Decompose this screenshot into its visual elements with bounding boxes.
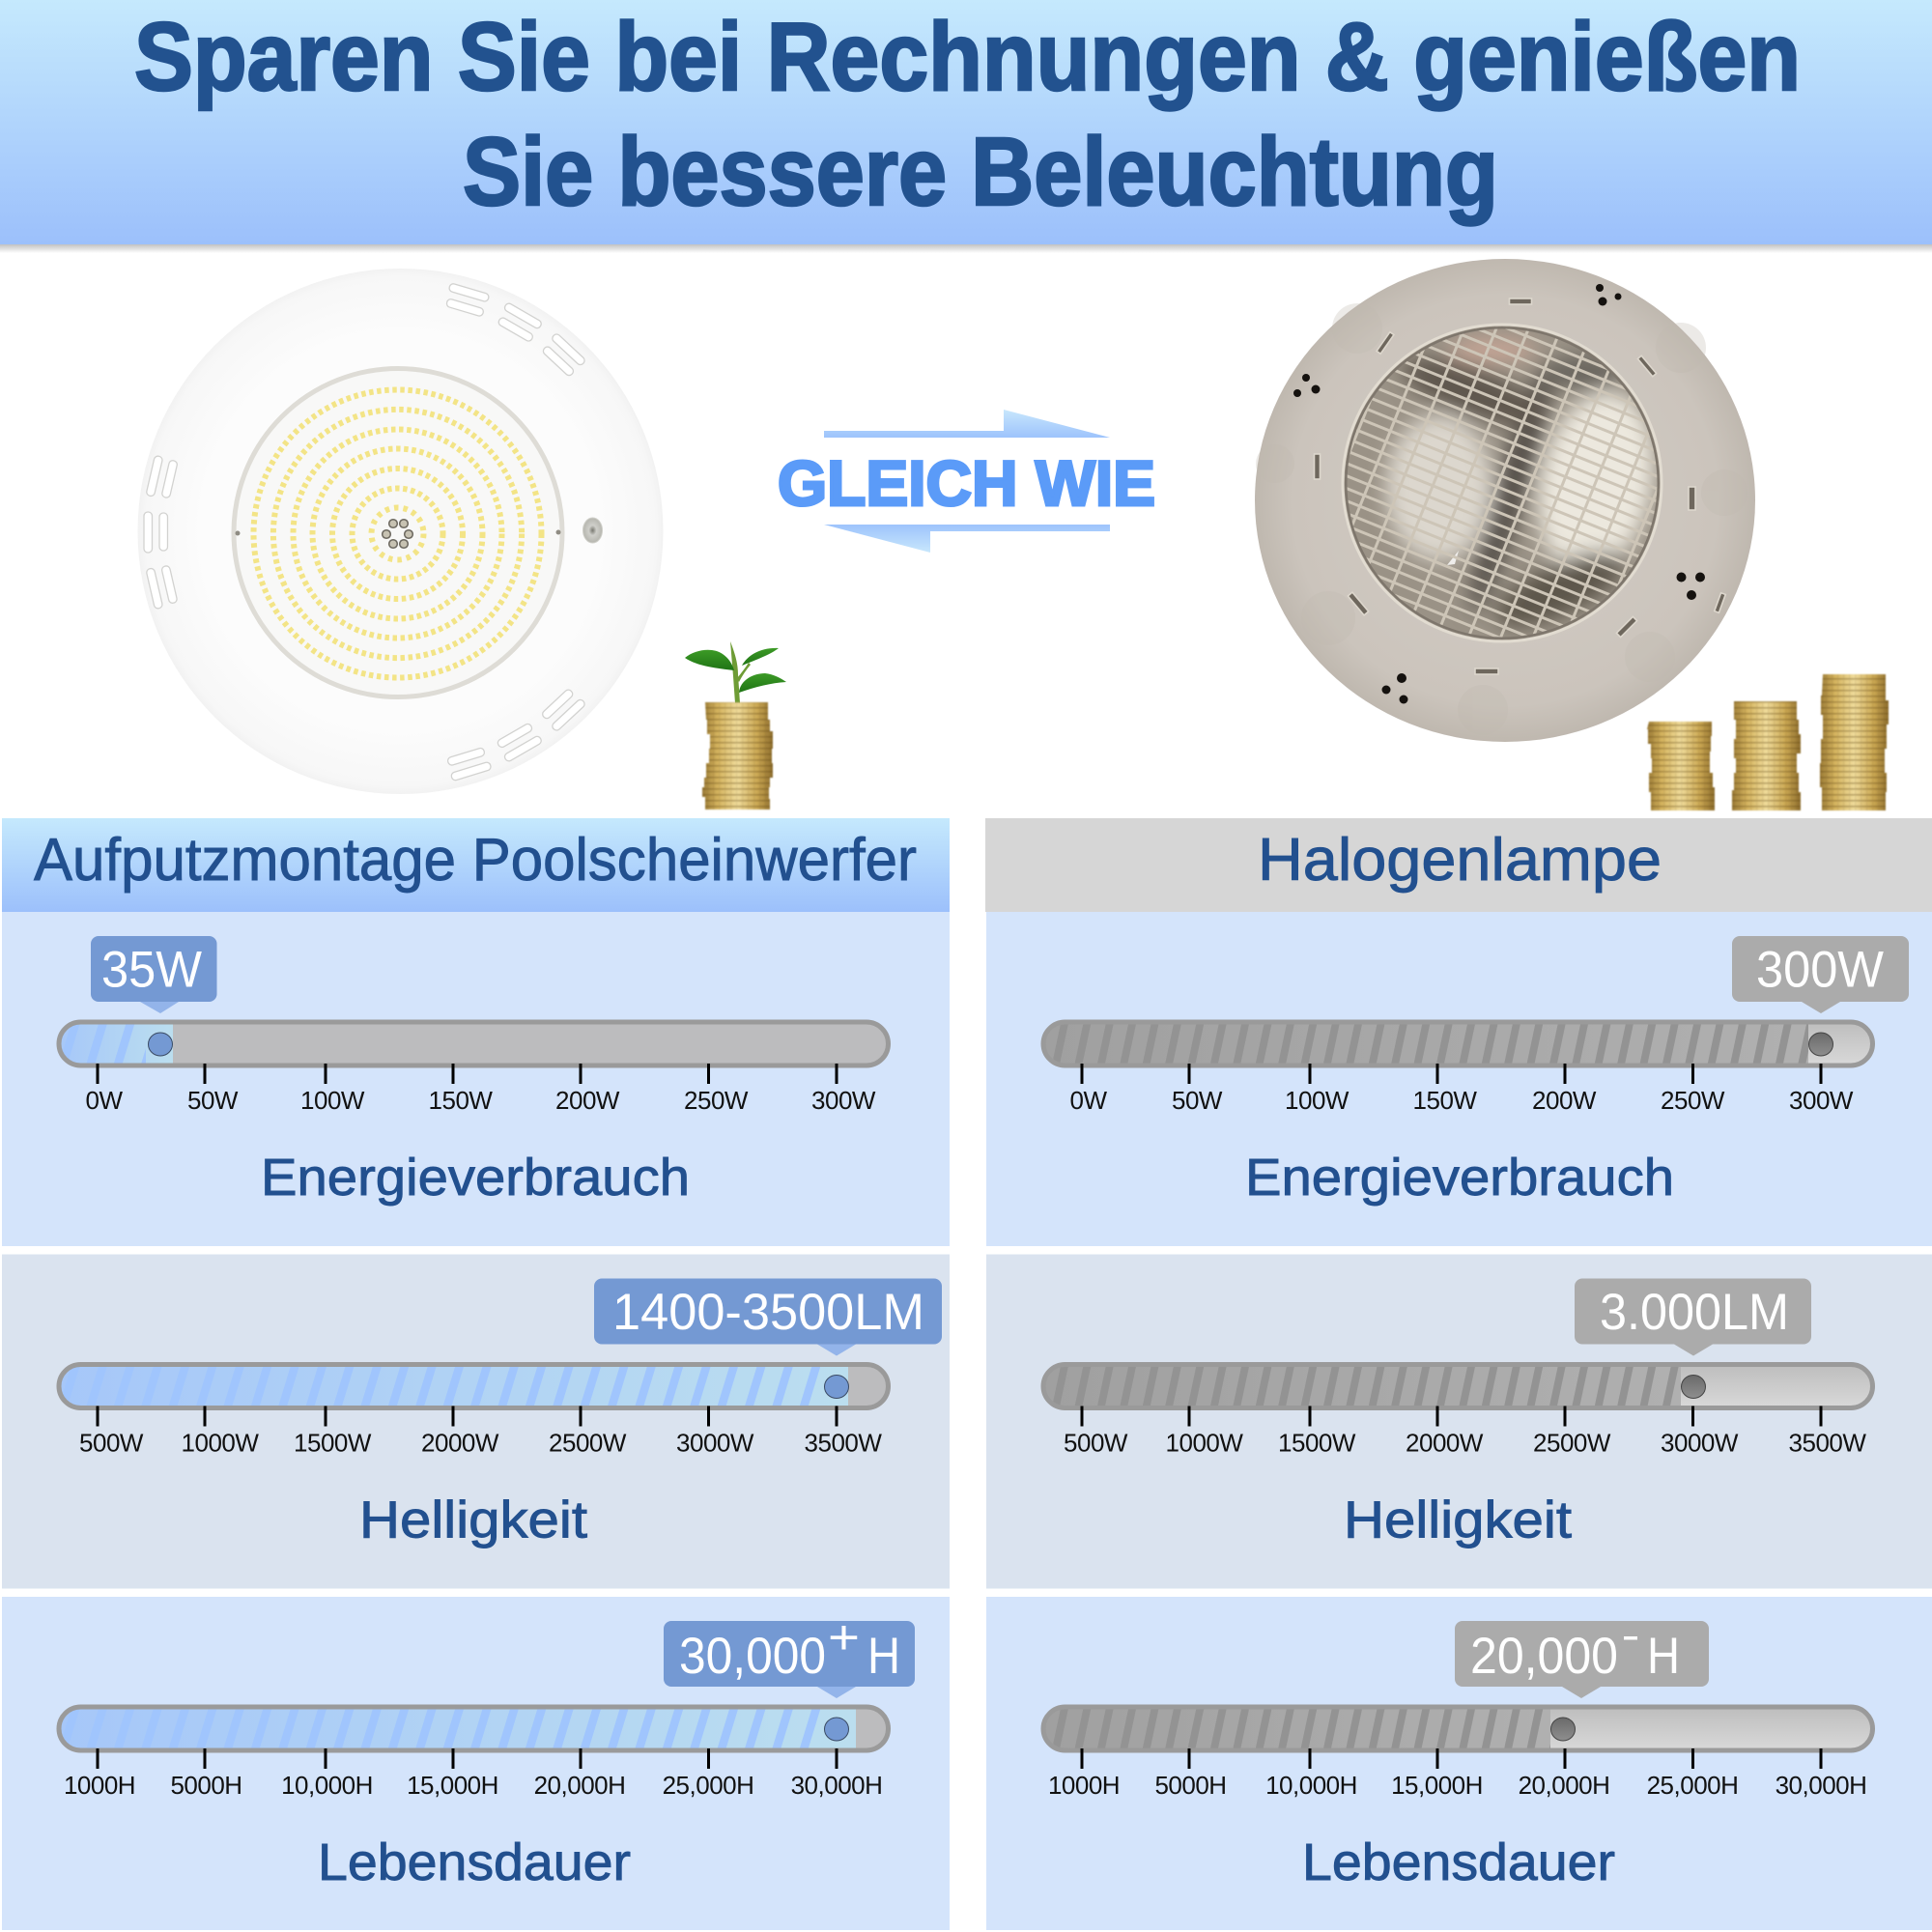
- track: [1041, 1364, 1872, 1408]
- column header: halogen: [985, 818, 1932, 912]
- scale labels: 150W: [1413, 1086, 1477, 1115]
- callout: [594, 1279, 942, 1356]
- scale labels: 300W: [811, 1086, 876, 1115]
- plate pins: [236, 529, 560, 535]
- callout: 20,000: [1470, 1628, 1618, 1685]
- ticks: [97, 1064, 838, 1084]
- metric name: Lebensdauer: [318, 1833, 631, 1891]
- callout: [664, 1610, 915, 1698]
- scale labels: 30,000H: [791, 1771, 882, 1800]
- label: GLEICH WIE: [778, 447, 1155, 519]
- ticks: [1080, 1748, 1822, 1769]
- vent slots: [144, 283, 586, 781]
- medium stack: [1732, 701, 1801, 810]
- ticks: [97, 1406, 838, 1426]
- callout: 35W: [101, 941, 202, 999]
- ticks: [97, 1748, 838, 1769]
- scale labels: 3000W: [676, 1428, 754, 1457]
- scale labels: [64, 1771, 882, 1800]
- rim blobs: [1256, 303, 1747, 735]
- callout: 300W: [1756, 941, 1884, 999]
- coin stack: [702, 702, 773, 810]
- scale labels: 50W: [1172, 1086, 1223, 1115]
- scale labels: 2000W: [1406, 1428, 1484, 1457]
- LED pool lamp image: [137, 269, 663, 794]
- column header: LED: [2, 818, 950, 912]
- callout: [1455, 1621, 1709, 1698]
- coin stacks: [1647, 674, 1889, 810]
- scale labels: 300W: [1789, 1086, 1854, 1115]
- scale labels: [1048, 1771, 1866, 1800]
- track: [1041, 1707, 1872, 1750]
- panel: halogen power: [986, 912, 1932, 1246]
- scale labels: 100W: [300, 1086, 365, 1115]
- metric name: Lebensdauer: [1302, 1833, 1615, 1891]
- title: Sie bessere Beleuchtung: [463, 118, 1498, 226]
- scale labels: 3500W: [1789, 1428, 1866, 1457]
- header banner: [0, 0, 1932, 253]
- scale labels: [79, 1428, 882, 1457]
- panel: halogen brightness: [986, 1254, 1932, 1588]
- callout: H: [867, 1628, 900, 1685]
- track: [57, 1022, 889, 1065]
- scale labels: 30,000H: [1776, 1771, 1866, 1800]
- callout: H: [1647, 1628, 1680, 1685]
- plant growing from coin stack: [685, 641, 786, 810]
- metric name: Helligkeit: [1344, 1492, 1572, 1549]
- scale labels: 250W: [684, 1086, 749, 1115]
- callout: +: [828, 1610, 860, 1664]
- scale labels: 10,000H: [1265, 1771, 1357, 1800]
- scale labels: 1500W: [1278, 1428, 1356, 1457]
- scale labels: 2000W: [421, 1428, 499, 1457]
- scale labels: [1070, 1086, 1854, 1115]
- rim slots: [1314, 298, 1725, 674]
- track: [57, 1707, 889, 1750]
- title: Sparen Sie bei Rechnungen & genießen: [134, 3, 1801, 111]
- callout: 1400-3500LM: [612, 1284, 924, 1341]
- scale labels: 25,000H: [1647, 1771, 1738, 1800]
- scale labels: [1064, 1428, 1866, 1457]
- scale labels: 250W: [1661, 1086, 1725, 1115]
- scale labels: 20,000H: [1519, 1771, 1609, 1800]
- scale labels: 1000W: [182, 1428, 259, 1457]
- callout: 30,000: [679, 1628, 826, 1685]
- scale labels: 50W: [187, 1086, 239, 1115]
- metric name: Energieverbrauch: [261, 1149, 690, 1207]
- panel: LED lifetime: [2, 1597, 950, 1930]
- scale labels: 0W: [85, 1086, 123, 1115]
- scale labels: 10,000H: [281, 1771, 373, 1800]
- metric name: Energieverbrauch: [1245, 1149, 1674, 1207]
- scale labels: 500W: [79, 1428, 144, 1457]
- callout: [1575, 1279, 1811, 1356]
- mounting screw: [583, 518, 603, 543]
- ticks: [1080, 1064, 1822, 1084]
- scale labels: 0W: [1070, 1086, 1107, 1115]
- LED rings: [253, 390, 541, 678]
- arrows and comparison label: [778, 410, 1155, 553]
- callout: [91, 936, 216, 1013]
- panel: LED brightness: [2, 1254, 950, 1588]
- ticks: [1080, 1406, 1822, 1426]
- LED plate: [234, 369, 562, 697]
- column header: halogen: Halogenlampe: [1258, 827, 1662, 894]
- callout: [1732, 936, 1909, 1013]
- scale labels: 25,000H: [663, 1771, 753, 1800]
- scale labels: 1500W: [294, 1428, 372, 1457]
- scale labels: 1000H: [1048, 1771, 1120, 1800]
- scale labels: 200W: [1532, 1086, 1597, 1115]
- arrow: right: [824, 410, 1110, 438]
- centre LEDs: [383, 520, 412, 548]
- callout: 3.000LM: [1600, 1284, 1789, 1341]
- scale labels: 1000H: [64, 1771, 135, 1800]
- halogen lamp image: [1255, 259, 1755, 742]
- track: [1041, 1022, 1872, 1065]
- scale labels: 150W: [429, 1086, 493, 1115]
- tall stack: [1820, 674, 1889, 810]
- scale labels: 5000H: [1154, 1771, 1227, 1800]
- scale labels: 3000W: [1661, 1428, 1739, 1457]
- scale labels: 2500W: [549, 1428, 627, 1457]
- scale labels: 5000H: [170, 1771, 242, 1800]
- scale labels: 20,000H: [534, 1771, 625, 1800]
- scale labels: [85, 1086, 876, 1115]
- arrow: left: [824, 525, 1110, 553]
- lens with grid: [1333, 319, 1671, 647]
- scale labels: 1000W: [1166, 1428, 1243, 1457]
- scale labels: 2500W: [1533, 1428, 1611, 1457]
- scale labels: 3500W: [805, 1428, 882, 1457]
- scale labels: 15,000H: [407, 1771, 498, 1800]
- scale labels: 15,000H: [1391, 1771, 1483, 1800]
- scale labels: 500W: [1064, 1428, 1128, 1457]
- small stack: [1647, 722, 1715, 810]
- plant: [685, 641, 786, 703]
- title: [134, 3, 1801, 226]
- column header: LED: Aufputzmontage Poolscheinwerfer: [34, 827, 917, 894]
- panel: halogen lifetime: [986, 1597, 1932, 1930]
- scale labels: 100W: [1285, 1086, 1350, 1115]
- metric name: Helligkeit: [359, 1492, 587, 1549]
- scale labels: 200W: [555, 1086, 620, 1115]
- track: [57, 1364, 889, 1408]
- rim holes: [1293, 284, 1705, 703]
- panel: LED power: [2, 912, 950, 1246]
